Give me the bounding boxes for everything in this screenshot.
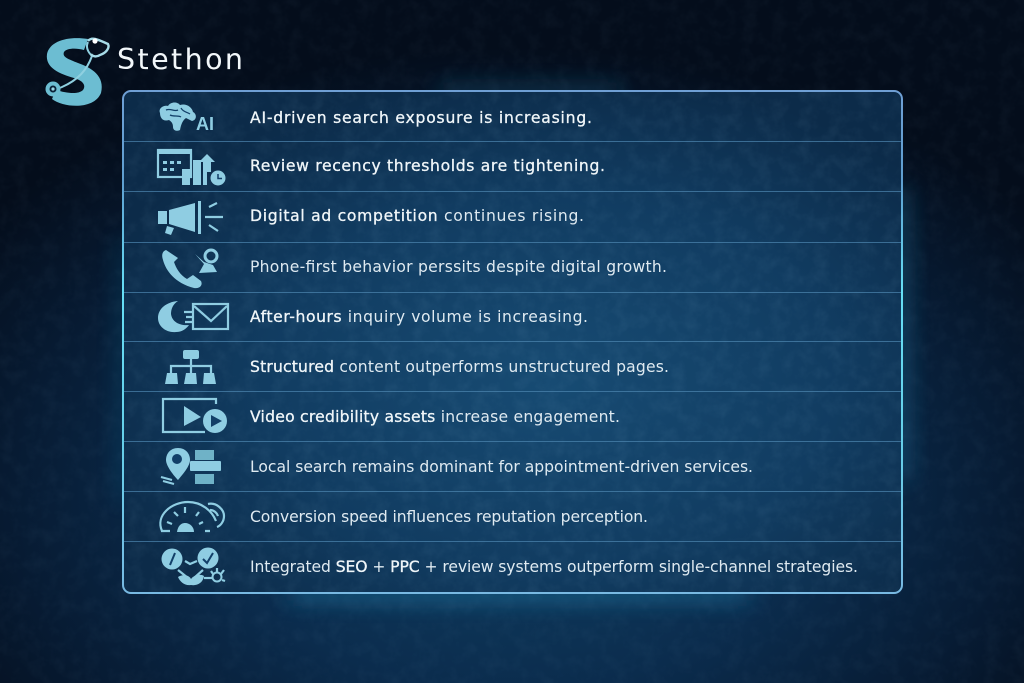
text: Video credibility assets increase engagement. (250, 408, 620, 426)
panel glow (123, 91, 902, 594)
text: Conversion speed influences reputation perception. (250, 508, 648, 526)
icon: integrated nodes (162, 548, 225, 585)
text: Local search remains dominant for appointment-driven services. (250, 458, 753, 476)
row 7 (163, 399, 620, 433)
icon: map pin and blocks (161, 448, 221, 484)
icon: phone and person (162, 250, 217, 288)
wordmark: Stethon (117, 43, 243, 76)
icon: video play (163, 399, 227, 433)
text: Integrated SEO + PPC + review systems outperform single-channel strategies. (250, 558, 858, 576)
row 3 (158, 201, 584, 235)
text: Digital ad competition continues rising. (250, 207, 584, 225)
row 8 (161, 448, 753, 484)
icon: AI brain (160, 102, 214, 134)
text: Phone-first behavior perssits despite digital growth. (250, 258, 667, 276)
text: AI-driven search exposure is increasing. (250, 109, 592, 127)
row 6 (165, 350, 669, 384)
row 9 (160, 502, 648, 532)
text: After-hours inquiry volume is increasing. (250, 308, 588, 326)
panel: trends list (123, 91, 902, 594)
panel border (123, 91, 902, 593)
row 5 (158, 301, 588, 332)
row 1 (160, 102, 592, 134)
icon: speedometer (160, 502, 224, 532)
icon: hierarchy (165, 350, 216, 384)
row 4 (162, 250, 667, 288)
icon: megaphone (158, 201, 223, 235)
icon: moon and envelope (158, 301, 228, 332)
row 10 (162, 548, 858, 585)
panel body (123, 91, 902, 593)
icon: AI brain: AI (196, 114, 214, 134)
text: Structured content outperforms unstructured pages. (250, 358, 669, 376)
logo: Stethon (46, 38, 243, 106)
text: Review recency thresholds are tightening. (250, 157, 605, 175)
row 2 (157, 149, 605, 186)
icon: calendar and rising bars (157, 149, 226, 186)
icon: S stethoscope logo (46, 38, 109, 106)
